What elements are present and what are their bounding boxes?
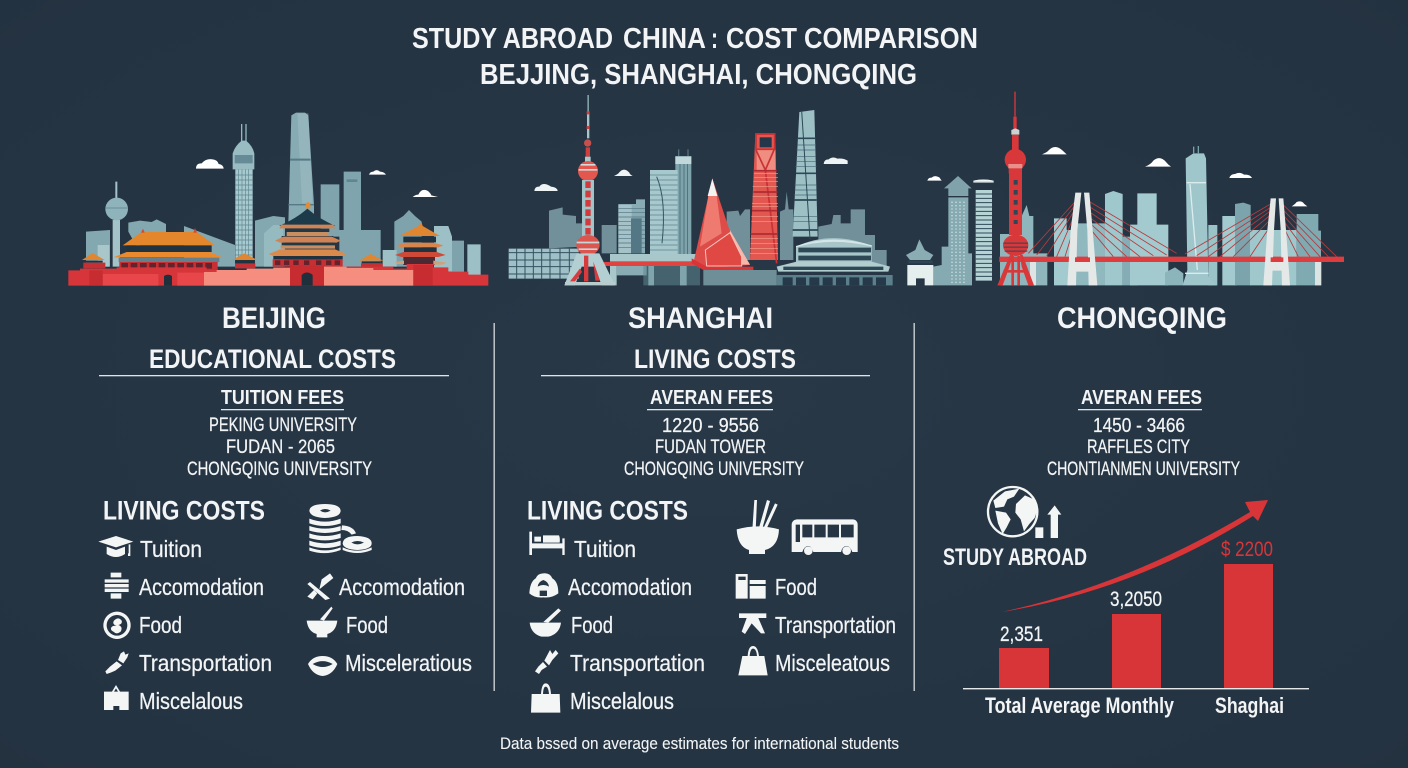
illustration: Shanghai skyline <box>509 95 893 285</box>
city buildings <box>1054 191 1321 285</box>
icon: graduation cap <box>98 536 133 557</box>
average fees block: AVERAN FEES <box>650 386 773 409</box>
icon: backpack <box>529 573 558 597</box>
Shanghai tower <box>793 110 818 239</box>
icon: shopping bag <box>738 646 768 675</box>
icon: globe with up arrow <box>988 487 1061 538</box>
icon: bowl with chopsticks <box>737 500 779 554</box>
icon: table <box>739 613 766 634</box>
living costs list: Misceleratious <box>345 650 472 676</box>
illustration: Chongqing skyline <box>906 92 1344 285</box>
living costs list <box>527 496 896 714</box>
icon: ring <box>308 656 337 676</box>
tuition fees block: FUDAN - 2065 <box>226 436 335 458</box>
bar chart: total average monthly: $ 2200 <box>1221 538 1273 561</box>
icon: bowl with spoon <box>307 607 337 637</box>
section heading: living costs: LIVING COSTS <box>634 344 796 374</box>
title <box>412 23 978 91</box>
average fees block: RAFFLES CITY <box>1087 436 1190 458</box>
living costs list: LIVING COSTS <box>103 496 265 526</box>
tuition fees block: CHONGQING UNIVERSITY <box>187 458 372 480</box>
icon: brush <box>535 650 558 674</box>
bar chart: total average monthly: 2,351 <box>1000 623 1043 646</box>
living costs list: Food <box>139 612 182 638</box>
average fees block: AVERAN FEES <box>1081 386 1202 409</box>
average fees block: CHONTIANMEN UNIVERSITY <box>1047 458 1240 480</box>
footnote: Data bssed on average estimates for international students <box>500 735 899 753</box>
living costs list: Transportation <box>570 650 705 676</box>
living costs list: LIVING COSTS <box>527 496 688 526</box>
temple <box>269 202 347 267</box>
illustration: Beijing skyline <box>68 113 488 286</box>
bar chart: total average monthly <box>963 538 1309 718</box>
icon: bed <box>529 532 565 555</box>
average fees block <box>1047 386 1240 480</box>
bridge towers <box>1030 193 1321 285</box>
living costs list: Transportation <box>775 612 896 638</box>
city heading: Beijing: BEIJING <box>222 302 326 335</box>
average fees block: FUDAN TOWER <box>655 436 766 458</box>
living costs list: Accomodation <box>139 574 264 600</box>
section heading: educational costs: EDUCATIONAL COSTS <box>149 344 396 374</box>
average fees block: 1450 - 3466 <box>1093 415 1185 437</box>
icon: bus <box>792 519 858 552</box>
city wall <box>68 264 488 286</box>
pagoda <box>395 223 447 265</box>
title: BEJJING, SHANGHAI, CHONGQING <box>480 59 917 91</box>
living costs list: Miscelalous <box>139 688 243 714</box>
icon: brush <box>105 651 129 674</box>
red tower <box>997 92 1034 285</box>
label: study abroad: STUDY ABROAD <box>943 544 1087 571</box>
living costs list: Accomodation <box>339 574 465 600</box>
living costs list: Miscelalous <box>570 688 674 714</box>
average fees block: 1220 - 9556 <box>662 415 759 437</box>
tuition fees block <box>187 386 372 480</box>
exhibition hall <box>777 238 893 285</box>
icon: bag <box>104 685 129 710</box>
bar chart: total average monthly: Shaghai <box>1215 693 1284 718</box>
title: COST COMPARISON <box>726 23 978 55</box>
icon: circled symbol <box>103 612 131 639</box>
city heading: Shanghai: SHANGHAI <box>628 302 773 335</box>
living costs list: Food <box>346 612 388 638</box>
living costs list: Misceleatous <box>775 650 890 676</box>
icon: coin stack large <box>309 504 372 553</box>
icon: stacked coins <box>105 573 129 599</box>
small pavilions <box>82 253 383 268</box>
living costs list: Tuition <box>574 536 636 562</box>
panel: Chongqing <box>943 302 1309 718</box>
living cost icons: Beijing <box>98 504 372 710</box>
living costs list: Transportation <box>139 650 272 676</box>
bar chart: total average monthly: 3,2050 <box>1110 588 1162 611</box>
living costs list: Food <box>775 574 817 600</box>
divider lines <box>494 323 915 691</box>
title: CHINA <box>623 23 706 55</box>
palace <box>113 228 222 270</box>
icon: chopsticks <box>307 573 333 600</box>
living cost icons: Shanghai <box>529 500 858 713</box>
title: : <box>711 23 718 55</box>
living costs list <box>103 496 472 714</box>
living costs list: Tuition <box>140 536 202 562</box>
icon: storage boxes <box>736 574 766 599</box>
bridge cables <box>1028 200 1337 257</box>
living costs list: Food <box>571 612 613 638</box>
tuition fees block: PEKING UNIVERSITY <box>209 414 357 436</box>
average fees block <box>624 386 804 480</box>
bar chart: total average monthly: Total Average Monthly <box>985 693 1175 718</box>
oriental pearl tower <box>564 95 615 285</box>
city heading: Chongqing: CHONGQING <box>1057 302 1227 335</box>
panel: Beijing <box>98 302 472 714</box>
tuition fees block: TUITION FEES <box>221 386 344 409</box>
arrow: rising trend <box>1002 500 1268 612</box>
living costs list: Accomodation <box>568 574 692 600</box>
title: STUDY ABROAD <box>412 23 613 55</box>
panel: Shanghai <box>527 302 896 714</box>
average fees block: CHONGQING UNIVERSITY <box>624 458 804 480</box>
icon: bag <box>531 683 560 713</box>
icon: bowl with spoon <box>530 608 561 637</box>
red pyramid <box>692 178 777 285</box>
red skyscraper <box>750 133 778 263</box>
